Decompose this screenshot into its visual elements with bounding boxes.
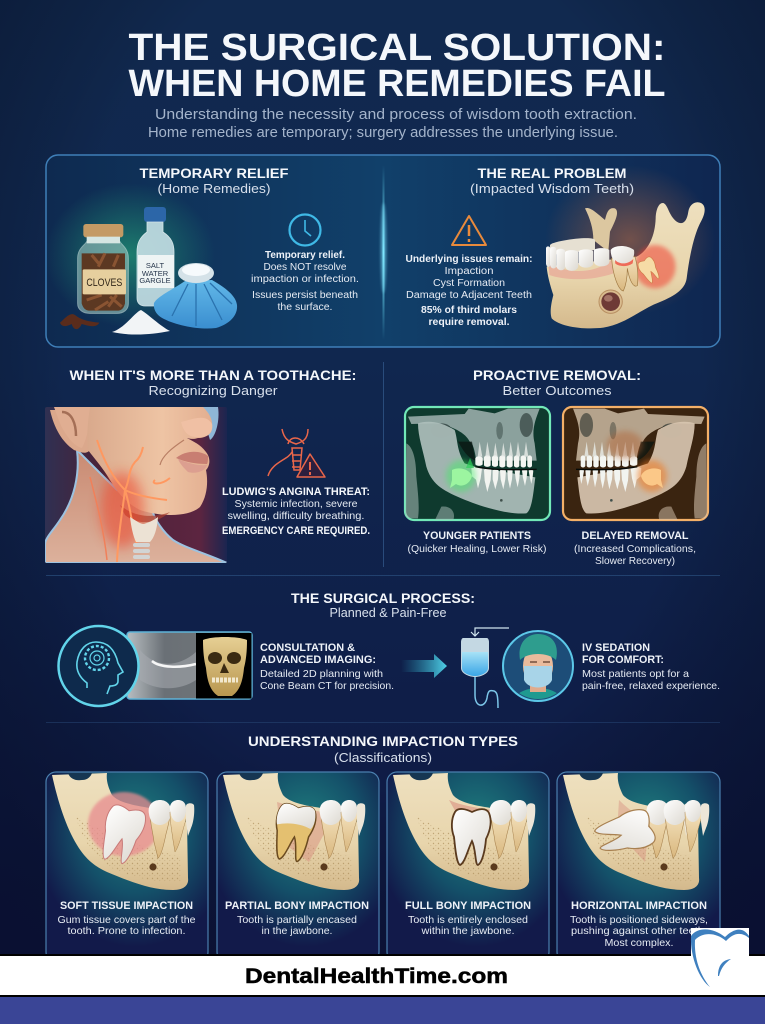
text: real problem notes: Damage to Adjacent Teeth xyxy=(406,290,532,301)
heading: temporary relief: TEMPORARY RELIEF xyxy=(140,166,288,181)
card: partial bony impaction: Tooth is partially encased xyxy=(237,914,357,926)
text: temporary relief notes xyxy=(251,250,359,313)
panel: dental x-ray and CT skull xyxy=(127,632,252,699)
text: real problem notes xyxy=(406,254,532,328)
card: soft tissue impaction xyxy=(46,772,208,962)
text: real problem notes: Impaction xyxy=(444,266,494,277)
caption: delayed removal xyxy=(574,530,696,567)
website name: DentalHealthTime.com xyxy=(245,965,508,988)
icon: jar of cloves: CLOVES xyxy=(86,277,122,289)
caption: delayed removal: DELAYED REMOVAL xyxy=(582,530,689,542)
image: delayed removal x-ray xyxy=(563,407,708,521)
text: IV sedation: IV SEDATION xyxy=(582,642,650,654)
illustration: face and neck with infection xyxy=(45,407,227,563)
card: full bony impaction: within the jawbone. xyxy=(420,925,515,937)
title: WHEN HOME REMEDIES FAIL xyxy=(128,63,666,105)
icon: salt water gargle bottle: SALT xyxy=(146,261,165,270)
heading: more than a toothache xyxy=(70,368,356,398)
text: consultation and imaging xyxy=(260,642,394,692)
caption: delayed removal: Slower Recovery) xyxy=(595,555,675,567)
icon: head with gear xyxy=(58,626,138,706)
text: Ludwig's angina: swelling, difficulty breathing. xyxy=(228,510,364,522)
subtitle: Home remedies are temporary; surgery addresses the underlying issue. xyxy=(148,125,618,141)
icon: warning triangle xyxy=(452,216,486,245)
footer band xyxy=(0,954,765,1024)
icon: salt water gargle bottle: WATER xyxy=(142,269,169,278)
card: full bony impaction xyxy=(387,772,549,962)
title: THE SURGICAL SOLUTION: xyxy=(128,27,666,69)
card: full bony impaction: FULL BONY IMPACTION xyxy=(405,900,531,912)
icon: surgeon portrait xyxy=(503,631,573,701)
card: partial bony impaction xyxy=(217,772,379,962)
card: horizontal impaction: Most complex. xyxy=(604,937,674,949)
text: real problem notes: Underlying issues remain: xyxy=(406,254,532,265)
card: horizontal impaction: Tooth is positioned sideways, xyxy=(570,914,708,926)
heading: impaction types: UNDERSTANDING IMPACTION TYPES xyxy=(248,734,518,749)
text: consultation and imaging: Detailed 2D planning with xyxy=(260,668,383,680)
text: real problem notes: 85% of third molars xyxy=(421,305,517,316)
icon: salt water gargle bottle xyxy=(137,207,174,306)
caption: younger patients: (Quicker Healing, Lower Risk) xyxy=(408,543,546,555)
text: temporary relief notes: Issues persist beneath xyxy=(252,290,358,301)
caption: younger patients: YOUNGER PATIENTS xyxy=(423,530,531,542)
heading: real problem xyxy=(470,166,634,196)
text: Ludwig's angina: Systemic infection, severe xyxy=(234,498,358,510)
card: partial bony impaction: PARTIAL BONY IMPACTION xyxy=(225,900,369,912)
icon: throat with warning xyxy=(268,429,325,477)
heading: surgical process: Planned & Pain-Free xyxy=(330,606,447,620)
heading: surgical process xyxy=(291,591,475,620)
text: Ludwig's angina: LUDWIG'S ANGINA THREAT: xyxy=(222,486,370,498)
card: soft tissue impaction: Gum tissue covers part of the xyxy=(58,914,196,926)
card: full bony impaction: Tooth is entirely enclosed xyxy=(408,914,528,926)
text: consultation and imaging: ADVANCED IMAGING: xyxy=(260,654,376,666)
image: younger patients x-ray xyxy=(405,407,550,521)
text: IV sedation xyxy=(582,642,720,692)
icon: salt pile xyxy=(112,310,170,335)
heading: more than a toothache: WHEN IT'S MORE THAN A TOOTHACHE: xyxy=(70,368,356,383)
icon: salt water gargle bottle: GARGLE xyxy=(139,276,171,285)
caption: younger patients xyxy=(408,530,546,555)
text: real problem notes: require removal. xyxy=(428,317,510,328)
text: Ludwig's angina xyxy=(222,486,370,537)
text: real problem notes: Cyst Formation xyxy=(433,278,505,289)
text: temporary relief notes: impaction or infection. xyxy=(251,274,359,285)
subtitle xyxy=(148,107,637,141)
card: soft tissue impaction: SOFT TISSUE IMPACTION xyxy=(60,900,193,912)
card: horizontal impaction xyxy=(557,772,720,962)
text: consultation and imaging: CONSULTATION & xyxy=(260,642,355,654)
arrow xyxy=(401,654,447,678)
heading: impaction types: (Classifications) xyxy=(334,751,432,765)
illustration: lower jaw with impacted tooth xyxy=(546,202,705,328)
caption: delayed removal: (Increased Complications, xyxy=(574,543,696,555)
subtitle: Understanding the necessity and process of wisdom tooth extraction. xyxy=(155,107,637,123)
card: horizontal impaction: pushing against other teeth. xyxy=(571,925,707,937)
heading: real problem: THE REAL PROBLEM xyxy=(478,166,626,181)
heading: real problem: (Impacted Wisdom Teeth) xyxy=(470,181,634,196)
text: temporary relief notes: Does NOT resolve xyxy=(264,262,347,273)
vertical divider between danger and proactive sections xyxy=(383,362,384,567)
card: horizontal impaction: HORIZONTAL IMPACTION xyxy=(571,900,707,912)
text: IV sedation: pain-free, relaxed experience. xyxy=(582,680,720,692)
heading: surgical process: THE SURGICAL PROCESS: xyxy=(291,591,475,606)
icon: jar of cloves xyxy=(60,224,128,329)
heading: proactive removal xyxy=(473,368,641,398)
heading: proactive removal: Better Outcomes xyxy=(502,383,612,398)
icon: IV bag xyxy=(461,628,509,708)
text: Ludwig's angina: EMERGENCY CARE REQUIRED. xyxy=(222,525,370,537)
heading: temporary relief xyxy=(140,166,288,196)
heading: temporary relief: (Home Remedies) xyxy=(158,181,270,196)
title xyxy=(128,27,666,105)
text: IV sedation: Most patients opt for a xyxy=(582,668,689,680)
panel: temporary relief and real problem xyxy=(45,155,720,347)
icon: clock xyxy=(290,214,320,246)
text: temporary relief notes: Temporary relief. xyxy=(265,250,345,261)
text: consultation and imaging: Cone Beam CT for precision. xyxy=(260,680,394,692)
heading: proactive removal: PROACTIVE REMOVAL: xyxy=(473,368,641,383)
card: soft tissue impaction: tooth. Prone to infection. xyxy=(68,925,186,937)
logo: tooth xyxy=(691,928,749,987)
card: partial bony impaction: in the jawbone. xyxy=(262,925,332,937)
heading: impaction types xyxy=(248,734,518,765)
icon: ice pack xyxy=(154,263,237,329)
text: temporary relief notes: the surface. xyxy=(278,302,332,313)
text: IV sedation: FOR COMFORT: xyxy=(582,654,664,666)
heading: more than a toothache: Recognizing Danger xyxy=(148,383,278,398)
